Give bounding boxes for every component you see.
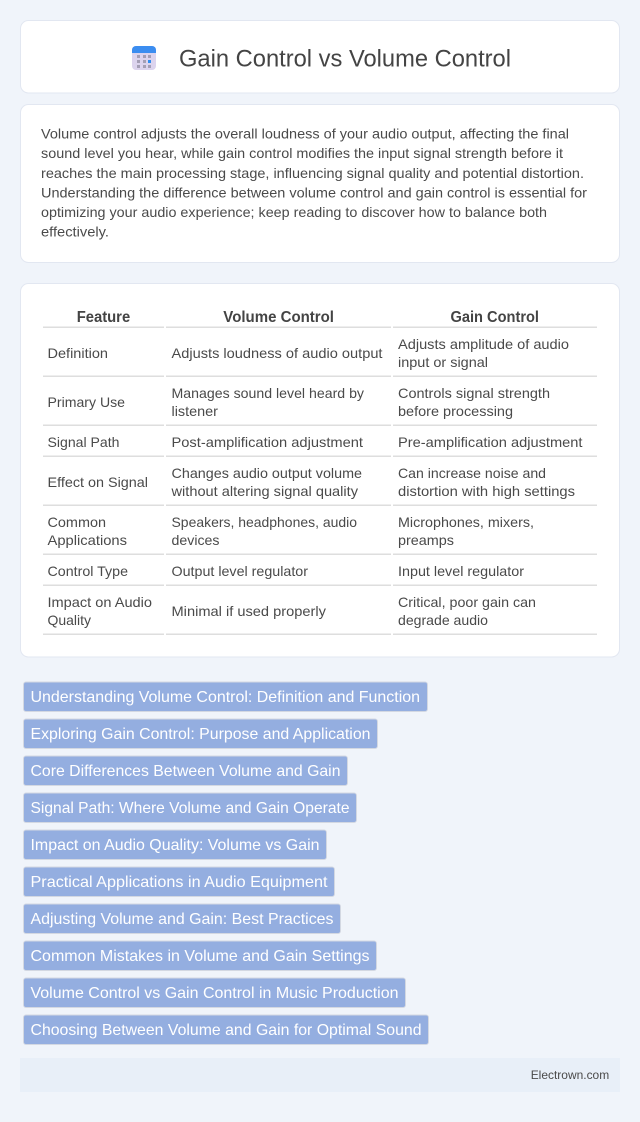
row: common applications: Speakers, headphones, audio (172, 514, 357, 530)
topic button 8 (24, 941, 376, 970)
intro paragraph (41, 126, 587, 240)
topic button 7 (24, 904, 340, 934)
row: definition (48, 336, 569, 370)
row: primary use: listener (172, 403, 218, 419)
row: control type: Control Type (48, 563, 128, 579)
row: impact on audio quality: degrade audio (398, 612, 488, 628)
row: effect on signal: Changes audio output volume (172, 465, 362, 481)
row: effect on signal (48, 465, 575, 499)
table header row: Feature (77, 309, 131, 326)
topic button 2: Exploring Gain Control: Purpose and Application (30, 726, 370, 743)
topic button 5 (24, 830, 326, 860)
row: definition: Adjusts amplitude of audio (398, 336, 569, 352)
panel: introduction (20, 104, 620, 262)
row: impact on audio quality: Quality (48, 612, 91, 628)
row: primary use: Controls signal strength (398, 385, 550, 401)
topic button 1: Understanding Volume Control: Definition and Function (30, 689, 420, 706)
topic button 4: Signal Path: Where Volume and Gain Operate (30, 800, 350, 817)
intro paragraph: effectively. (41, 224, 109, 240)
intro paragraph: Understanding the difference between volume control and gain control is essential for (41, 184, 587, 200)
row: common applications (48, 514, 534, 548)
header panel (20, 20, 620, 93)
topic button 3: Core Differences Between Volume and Gain (30, 763, 340, 780)
topic button 6: Practical Applications in Audio Equipment (30, 874, 328, 891)
row: common applications: Microphones, mixers, (398, 514, 534, 530)
panel: comparison table (20, 284, 620, 657)
row: primary use: Primary Use (48, 394, 125, 410)
row: effect on signal: without altering signal quality (170, 483, 358, 499)
row: control type: Input level regulator (398, 563, 524, 579)
row: impact on audio quality: Impact on Audio (48, 594, 152, 610)
row: effect on signal: Can increase noise and (398, 465, 546, 481)
topic button 4 (24, 793, 356, 822)
intro paragraph: Volume control adjusts the overall loudness of your audio output, affecting the final (41, 126, 569, 142)
title: Gain Control vs Volume Control (179, 46, 511, 72)
table header row (77, 309, 539, 326)
topic button 2 (24, 719, 378, 748)
row: impact on audio quality: Critical, poor gain can (398, 594, 536, 610)
topic list (24, 682, 428, 1044)
row: signal path (48, 434, 583, 450)
topic button 10 (24, 1015, 428, 1044)
intro paragraph: optimizing your audio experience; keep reading to discover how to balance both (41, 204, 547, 220)
row: common applications: preamps (398, 532, 454, 548)
row: definition: Definition (48, 345, 108, 361)
row: signal path: Post-amplification adjustment (172, 434, 363, 450)
topic button 3 (24, 756, 348, 786)
row: signal path: Signal Path (48, 434, 120, 450)
row: impact on audio quality (48, 594, 536, 628)
row: effect on signal: distortion with high settings (398, 483, 575, 499)
topic button 9 (24, 978, 406, 1008)
row: common applications: devices (172, 532, 220, 548)
topic button 8: Common Mistakes in Volume and Gain Settings (30, 948, 370, 965)
table header row: Volume Control (223, 309, 334, 326)
row: control type (48, 563, 524, 579)
row: definition: Adjusts loudness of audio output (172, 345, 383, 361)
row: signal path: Pre-amplification adjustment (398, 434, 583, 450)
topic button 7: Adjusting Volume and Gain: Best Practices (30, 911, 334, 928)
row: impact on audio quality: Minimal if used properly (172, 603, 326, 619)
icon: calendar grid (132, 46, 156, 70)
topic button 9: Volume Control vs Gain Control in Music Production (30, 985, 398, 1002)
row: primary use (48, 385, 550, 419)
topic button 1 (24, 682, 428, 712)
row: primary use: before processing (398, 403, 513, 419)
intro paragraph: sound level you hear, while gain control modifies the input signal strength before it (41, 145, 563, 161)
topic button 5: Impact on Audio Quality: Volume vs Gain (30, 837, 320, 854)
row: definition: input or signal (398, 354, 488, 370)
row: effect on signal: Effect on Signal (48, 474, 148, 490)
intro paragraph: reaches the main processing stage, influencing signal quality and potential distortion. (41, 165, 584, 181)
row: common applications: Applications (48, 532, 127, 548)
footer (20, 1058, 620, 1092)
row: primary use: Manages sound level heard by (172, 385, 364, 401)
row: control type: Output level regulator (172, 563, 308, 579)
topic button 6 (24, 867, 334, 896)
table header row: Gain Control (450, 309, 539, 326)
topic button 10: Choosing Between Volume and Gain for Optimal Sound (30, 1022, 422, 1039)
row: common applications: Common (48, 514, 106, 530)
footer: Electrown.com (531, 1068, 609, 1082)
